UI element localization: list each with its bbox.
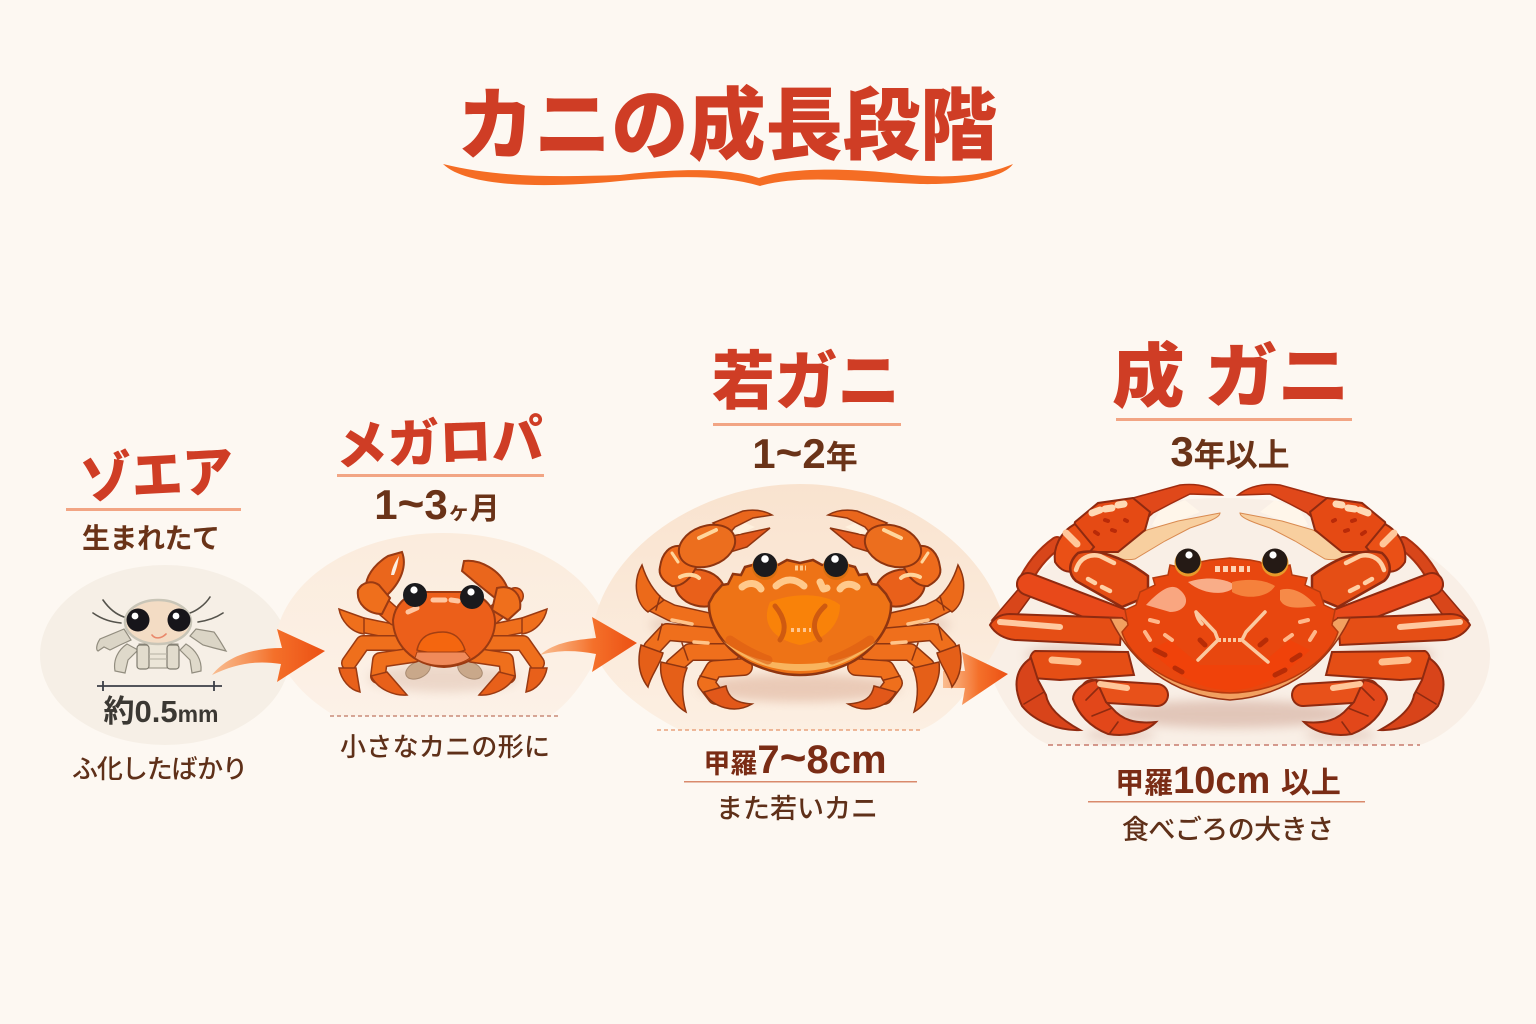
heading: adult crab: 成 ガニ [1112,338,1350,416]
stage 1: zoea [66,442,248,784]
illustration: megalopa crab [339,552,547,695]
panel: background adult [985,498,1490,745]
heading underline [1116,418,1352,421]
arrow 3 [943,652,1008,705]
icon: zoea larva [93,597,226,673]
baseline [330,715,558,717]
panel: background zoea [40,565,290,745]
baseline [1048,744,1420,746]
baseline [657,729,922,731]
heading underline [66,508,241,511]
caption: 食べごろの大きさ [1122,815,1334,845]
arrow 1 [212,629,325,682]
heading underline [713,423,901,426]
caption: ふ化したばかり [72,754,248,784]
illustration: adult crab [990,484,1470,742]
arrow 2 [540,617,637,672]
heading underline [337,474,544,477]
period: 生まれたて [82,523,220,554]
caption: また若いカニ [716,794,878,824]
size label: 約0.5mm [103,694,219,729]
size label: 甲羅10cm 以上 [1115,760,1341,802]
heading: megalopa: メガロパ [334,411,544,477]
period: 3年以上 [1170,428,1290,475]
stage 2: megalopa [330,411,558,762]
heading: young crab: 若ガニ [712,346,900,418]
title underline swash [443,164,1013,186]
illustration: young crab [636,510,964,712]
size scale [97,681,222,691]
stage 3: young crab [636,346,964,824]
panel: background megalopa [275,533,608,716]
caption: 小さなカニの形に [340,732,550,762]
stage 4: adult crab [990,338,1470,845]
title: カニの成長段階 [457,81,997,170]
size underline [684,781,917,782]
heading: zoea: ゾエア [79,442,235,510]
size label: 甲羅7~8cm [703,731,887,783]
period: 1~2年 [752,426,858,478]
period: 1~3ヶ月 [374,477,500,529]
panel: background young crab [592,484,1005,730]
size underline [1088,801,1365,802]
